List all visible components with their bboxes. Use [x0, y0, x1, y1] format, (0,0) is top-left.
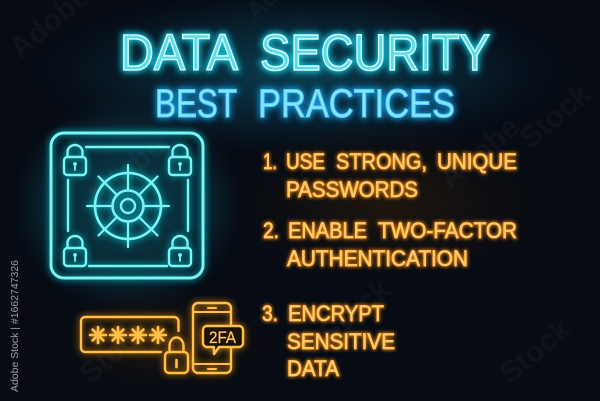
watermarks: Stock: [313, 272, 397, 350]
background glow: title: [30, 0, 570, 157]
item glow: [262, 149, 517, 381]
subtitle: [155, 82, 455, 126]
icon: password field, padlock and 2FA phone: [81, 303, 243, 373]
item 2: [263, 218, 517, 271]
watermarks: Adobe: [433, 110, 526, 195]
icon: vault with locks: [51, 133, 203, 278]
stock id text: Adobe Stock | #1662747326: [9, 260, 21, 392]
item 3: [262, 301, 395, 381]
watermarks: Stock: [73, 312, 157, 390]
background glow: list: [220, 120, 560, 290]
item 1: [263, 149, 517, 202]
watermarks: Stock: [513, 77, 597, 155]
background glow: vault: [9, 95, 245, 315]
2FA label: 2FA: [209, 328, 237, 347]
title: [120, 24, 490, 81]
background glow: password icons: [45, 285, 275, 395]
watermarks: Adobe: [78, 130, 171, 215]
watermarks: Stock: [493, 312, 577, 390]
list of practices: [262, 149, 517, 381]
